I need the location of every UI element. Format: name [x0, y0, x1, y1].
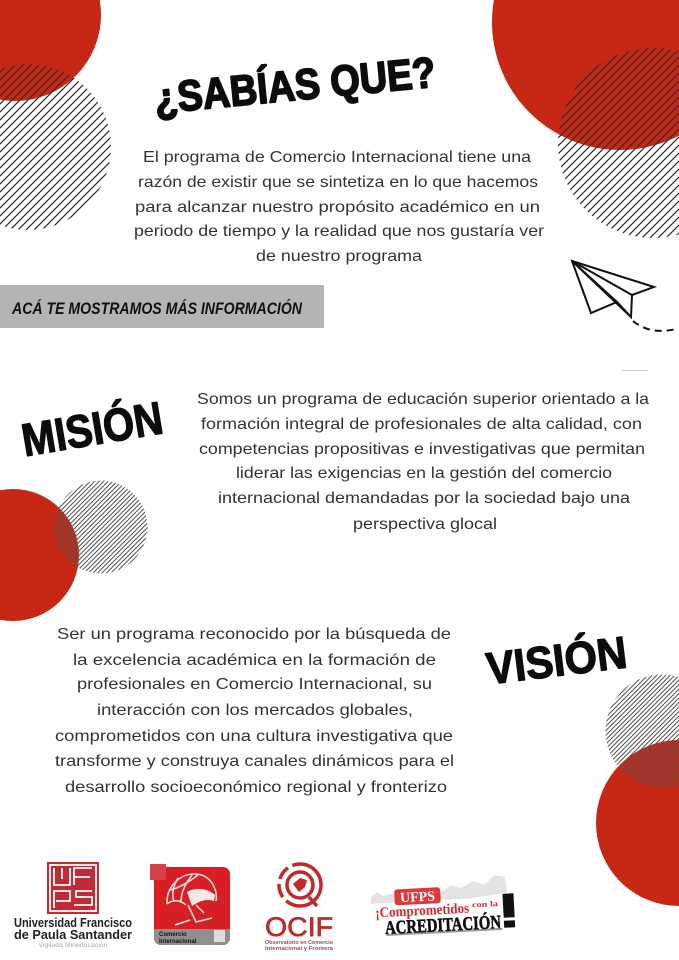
- intro text: [134, 149, 545, 265]
- logo: OCIF: [265, 864, 334, 952]
- heading: Misión: MISIÓN: [18, 391, 166, 466]
- vision text: comprometidos con una cultura investigativa que: [55, 728, 453, 745]
- vision text: profesionales en Comercio Internacional, su: [77, 676, 432, 693]
- logo: Comercio Internacional: Comercio: [159, 932, 187, 938]
- intro text: periodo de tiempo y la realidad que nos gustaría ver: [134, 223, 545, 240]
- banner: ACÁ TE MOSTRAMOS MÁS INFORMACIÓN: [11, 299, 303, 318]
- intro text: de nuestro programa: [256, 248, 422, 265]
- intro text: razón de existir que se sintetiza en lo que hacemos: [138, 174, 538, 191]
- icon: paper plane: [572, 261, 676, 331]
- mission text: internacional demandadas por la sociedad bajo una: [218, 490, 630, 507]
- logo: Comprometidos con la acreditación: ¡Comprometidos: [375, 901, 470, 921]
- logo: Comprometidos con la acreditación: [370, 874, 515, 940]
- mission text: [197, 391, 649, 533]
- logo: UFPS: de Paula Santander: [14, 928, 132, 942]
- logo: UFPS: [14, 862, 132, 949]
- heading: Visión: VISIÓN: [483, 627, 630, 694]
- vision text: Ser un programa reconocido por la búsqueda de: [57, 626, 451, 643]
- decoration: mission circles: [0, 480, 148, 621]
- logo: OCIF: OCIF: [265, 912, 333, 942]
- vision text: interacción con los mercados globales,: [97, 702, 413, 719]
- intro text: El programa de Comercio Internacional tiene una: [143, 149, 531, 166]
- logo: UFPS: Vigilada Mineducación: [38, 942, 108, 949]
- logo: Comercio Internacional: [150, 864, 230, 945]
- mission text: perspectiva glocal: [353, 516, 497, 533]
- logo: UFPS: Universidad Francisco: [14, 916, 132, 930]
- mission text: Somos un programa de educación superior orientado a la: [197, 391, 649, 408]
- logo: OCIF: Internacional y Frontera: [265, 946, 334, 952]
- logo: OCIF: Observatorio en Comercio: [265, 940, 334, 946]
- logo: Comprometidos con la acreditación: ACREDITACIÓN: [384, 911, 502, 939]
- vision text: desarrollo socioeconómico regional y fronterizo: [65, 779, 447, 796]
- logo: Comprometidos con la acreditación: UFPS: [400, 889, 436, 906]
- mission text: liderar las exigencias en la gestión del comercio: [236, 465, 612, 482]
- banner: [0, 285, 324, 328]
- mission text: competencias propositivas e investigativas que permitan: [199, 441, 645, 458]
- title: ¿SABÍAS QUE?: [152, 49, 438, 123]
- vision text: transforme y construya canales dinámicos para el: [55, 753, 454, 770]
- vision text: [55, 626, 454, 796]
- vision text: la excelencia académica en la formación de: [73, 652, 436, 669]
- logo: Comprometidos con la acreditación: con la: [472, 899, 498, 909]
- mission text: formación integral de profesionales de alta calidad, con: [201, 416, 642, 433]
- decoration: top-left circles: [0, 0, 111, 230]
- decoration: top-right circles: [492, 0, 679, 238]
- decoration: vision circles: [596, 674, 679, 906]
- intro text: para alcanzar nuestro propósito académico en un: [135, 199, 540, 216]
- logo: Comercio Internacional: Internacional: [159, 939, 197, 945]
